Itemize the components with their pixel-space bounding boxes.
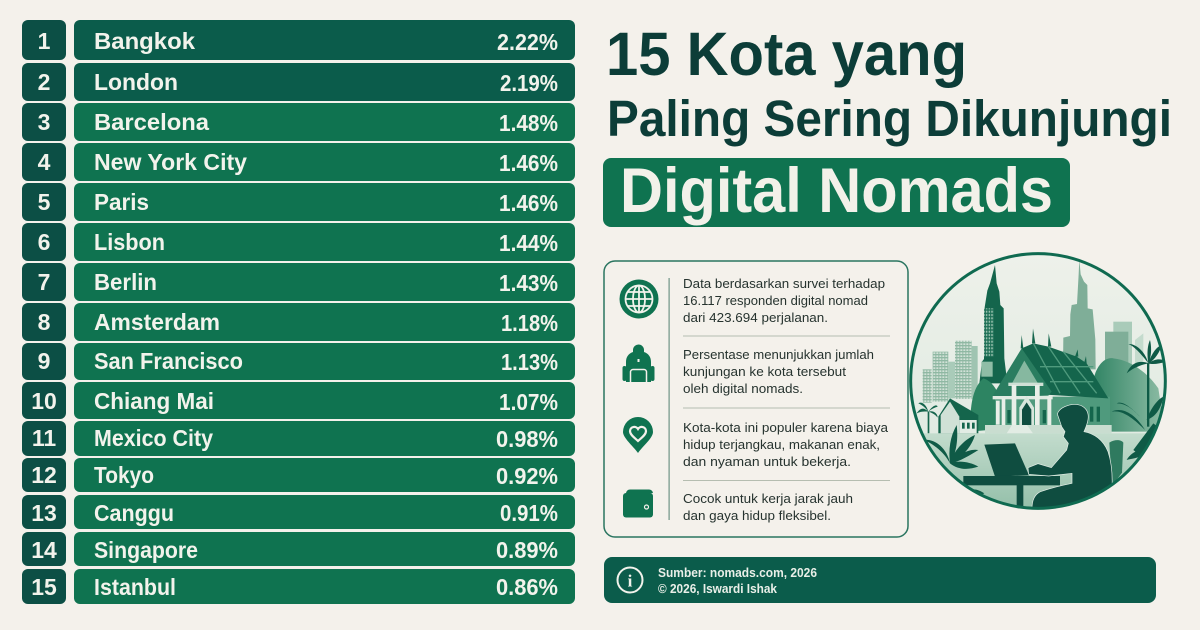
row 9: San Francisco	[22, 343, 575, 380]
row 5: Paris: 1.46%	[499, 190, 558, 216]
temple hall	[995, 397, 1110, 426]
text: percentage meaning: oleh digital nomads.	[683, 381, 803, 396]
source footer	[604, 557, 1156, 603]
row 1: Bangkok: 1	[38, 28, 51, 54]
temple door	[1019, 396, 1034, 425]
row 1: Bangkok: Bangkok	[94, 28, 195, 54]
row 5: Paris: Paris	[94, 189, 149, 215]
temple columns	[996, 385, 1051, 425]
row 14: Singapore: Singapore	[94, 537, 198, 563]
row 4: New York City: 1.46%	[499, 150, 558, 176]
row 11: Mexico City: 11	[32, 425, 56, 451]
row 8: Amsterdam	[22, 303, 575, 341]
icon: globe	[620, 280, 658, 318]
row 12: Tokyo: Tokyo	[94, 462, 154, 488]
row 7: Berlin	[22, 263, 575, 301]
row 3: Barcelona: 3	[38, 109, 50, 135]
left foliage	[923, 425, 984, 495]
row 14: Singapore: 14	[31, 537, 57, 563]
icon: backpack	[622, 344, 654, 382]
row 4: New York City: 4	[38, 149, 51, 175]
row 9: San Francisco: San Francisco	[94, 348, 243, 374]
row 8: Amsterdam: 1.18%	[501, 310, 558, 336]
icon: location heart	[623, 417, 653, 453]
text: why popular	[683, 420, 889, 469]
text: why popular: hidup terjangkau, makanan enak,	[683, 437, 880, 452]
row 6: Lisbon	[22, 223, 575, 261]
source text: Sumber: nomads.com, 2026	[658, 565, 817, 580]
ranking table	[22, 20, 575, 604]
row 13: Canggu: Canggu	[94, 500, 174, 526]
row 13: Canggu	[22, 495, 575, 529]
text: suitability: Cocok untuk kerja jarak jauh	[683, 491, 853, 506]
row 2: London: 2	[38, 69, 50, 95]
desk	[963, 476, 1060, 506]
row 8: Amsterdam: 8	[38, 309, 51, 335]
illustration: city and digital nomad	[907, 250, 1170, 520]
row 7: Berlin: Berlin	[94, 269, 157, 295]
row 5: Paris	[22, 183, 575, 221]
row 4: New York City	[22, 143, 575, 181]
far right buildings	[1105, 322, 1143, 368]
small house	[938, 398, 978, 433]
row 15: Istanbul	[22, 569, 575, 604]
row 12: Tokyo: 0.92%	[496, 463, 558, 489]
row 15: Istanbul: 15	[31, 574, 57, 600]
row 10: Chiang Mai: Chiang Mai	[94, 388, 214, 414]
row 10: Chiang Mai	[22, 382, 575, 419]
row 13: Canggu: 0.91%	[500, 500, 558, 526]
row 1: Bangkok	[22, 20, 575, 60]
title line 1: 15 Kota yang	[606, 20, 967, 88]
text: survey basis: Data berdasarkan survei terhadap	[683, 276, 885, 291]
title line 2: Paling Sering Dikunjungi	[607, 90, 1172, 147]
text: survey basis	[683, 276, 885, 325]
row 2: London: 2.19%	[500, 70, 558, 96]
text: percentage meaning: kunjungan ke kota tersebut	[683, 364, 846, 379]
icon: wallet	[623, 489, 653, 518]
row 10: Chiang Mai: 1.07%	[499, 389, 558, 415]
text: suitability: dan gaya hidup fleksibel.	[683, 508, 831, 523]
text: survey basis: 16.117 responden digital nomad	[683, 293, 868, 308]
row 15: Istanbul: 0.86%	[496, 574, 558, 600]
temple gable	[996, 348, 1052, 396]
ground	[924, 433, 1146, 507]
text: why popular: dan nyaman untuk bekerja.	[683, 454, 851, 469]
row 13: Canggu: 13	[31, 500, 57, 526]
row 2: London: London	[94, 69, 178, 95]
row 7: Berlin: 1.43%	[499, 270, 558, 296]
title highlight pill: Digital Nomads	[620, 156, 1053, 226]
row 9: San Francisco: 9	[38, 348, 50, 374]
source text	[658, 565, 817, 596]
icon: info: i	[628, 572, 633, 590]
row 8: Amsterdam: Amsterdam	[94, 309, 220, 335]
row 3: Barcelona: Barcelona	[94, 109, 209, 135]
tree masses	[970, 358, 1165, 432]
temple	[985, 328, 1112, 433]
row 15: Istanbul: Istanbul	[94, 574, 176, 600]
row 9: San Francisco: 1.13%	[501, 349, 558, 375]
row 11: Mexico City: Mexico City	[94, 425, 213, 451]
text: why popular: Kota-kota ini populer karena biaya	[683, 420, 889, 435]
row 6: Lisbon: 6	[38, 229, 50, 255]
row 1: Bangkok: 2.22%	[497, 29, 558, 55]
row 11: Mexico City	[22, 421, 575, 456]
person silhouette	[1028, 404, 1112, 508]
row 12: Tokyo: 12	[31, 462, 57, 488]
row 4: New York City: New York City	[94, 149, 247, 175]
small palm	[917, 403, 938, 433]
source text: © 2026, Iswardi Ishak	[658, 581, 778, 596]
laptop	[984, 443, 1029, 477]
row 6: Lisbon: Lisbon	[94, 229, 165, 255]
left tower blocks	[923, 341, 978, 403]
row 12: Tokyo	[22, 458, 575, 492]
row 2: London	[22, 63, 575, 101]
text: survey basis: dari 423.694 perjalanan.	[683, 310, 828, 325]
right palm and foliage	[1112, 340, 1167, 463]
ring	[911, 254, 1165, 508]
row 14: Singapore	[22, 532, 575, 566]
temple roof ridges	[1033, 343, 1097, 393]
row 7: Berlin: 7	[38, 269, 50, 295]
temple back roof	[1022, 343, 1108, 398]
row 11: Mexico City: 0.98%	[496, 426, 558, 452]
text: suitability	[683, 491, 853, 523]
row 3: Barcelona: 1.48%	[499, 110, 558, 136]
row 3: Barcelona	[22, 103, 575, 141]
row 5: Paris: 5	[38, 189, 51, 215]
chair	[1109, 440, 1123, 486]
text: percentage meaning: Persentase menunjukkan jumlah	[683, 347, 874, 362]
temple dark windows	[1007, 407, 1100, 423]
row 10: Chiang Mai: 10	[31, 388, 57, 414]
panel: survey notes	[604, 261, 908, 537]
row 14: Singapore: 0.89%	[496, 537, 558, 563]
row 6: Lisbon: 1.44%	[499, 230, 558, 256]
temple finials	[1021, 328, 1087, 363]
tall tower	[979, 265, 1007, 383]
icon: info	[618, 568, 642, 592]
title	[603, 20, 1172, 227]
text: percentage meaning	[683, 347, 874, 396]
right skyscraper	[1063, 259, 1096, 369]
